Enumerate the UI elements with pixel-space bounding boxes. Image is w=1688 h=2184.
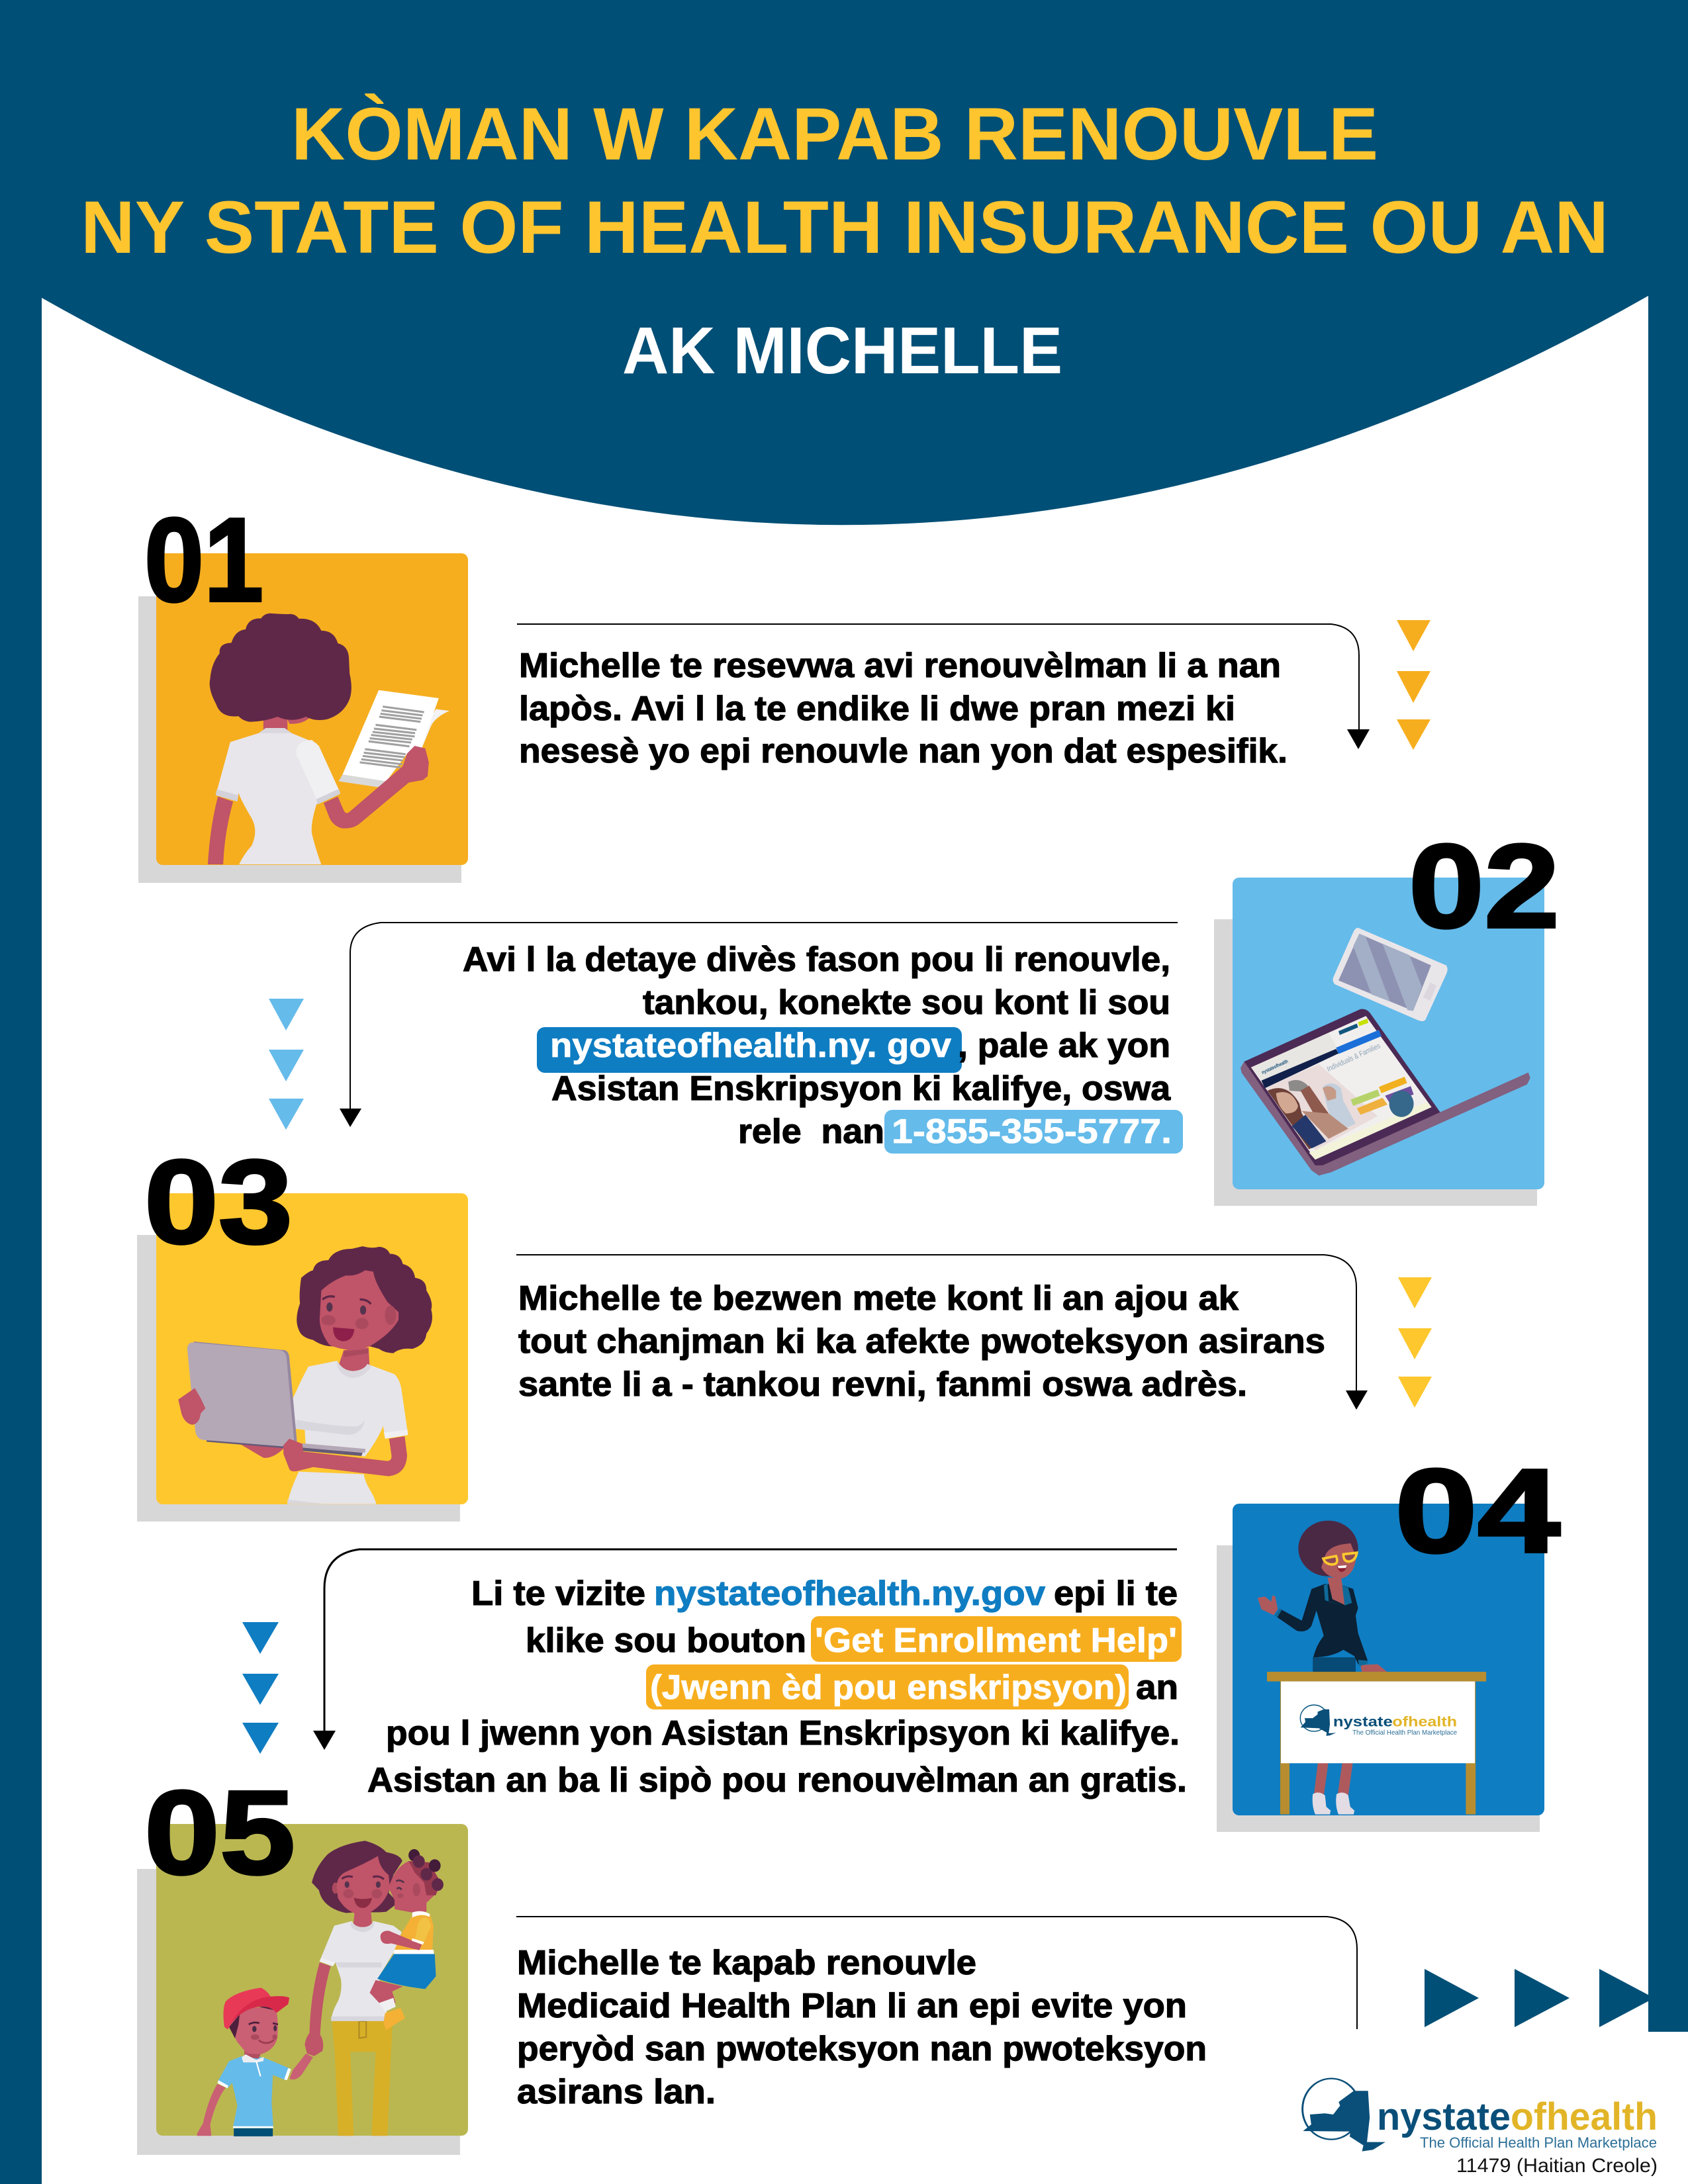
logo: NY State of Health: ofhealth xyxy=(1511,2095,1658,2138)
text block: step 02: Asistan Enskripsyon ki kalifye, oswa xyxy=(551,1069,1171,1108)
number 04: 04 xyxy=(1395,1445,1560,1578)
text block: step 05: peryòd san pwoteksyon nan pwoteksyon xyxy=(517,2030,1207,2068)
logo: NY State of Health: 11479 (Haitian Creole) xyxy=(1456,2155,1658,2177)
number 01: 01 xyxy=(144,494,263,627)
arrow: step 01 to 02 xyxy=(517,624,1370,749)
text block: step 05 xyxy=(517,1944,1207,2111)
number 02: 02 xyxy=(1409,820,1560,953)
icon: yellow chevrons 03 xyxy=(1398,1277,1432,1408)
connector: step 05 xyxy=(516,1917,1357,2029)
logo: NY State of Health: The Official Health Plan Marketplace xyxy=(1420,2134,1657,2151)
button chip: Get Enrollment Help: 'Get Enrollment Help' xyxy=(815,1621,1177,1660)
text block: step 04: pou l jwenn yon Asistan Enskripsyon ki kalifye. xyxy=(386,1714,1180,1752)
number 05: 05 xyxy=(144,1766,295,1899)
illustration: phone and tablet showing website: Individuals & Families xyxy=(1326,1042,1382,1073)
text block: step 03: Michelle te bezwen mete kont li an ajou ak xyxy=(518,1279,1239,1318)
text block: step 05: asirans lan. xyxy=(517,2073,716,2111)
logo on desk: nystate xyxy=(1333,1714,1393,1730)
text block: step 02 xyxy=(463,940,1183,1154)
button chip: Jwenn ed: (Jwenn èd pou enskripsyon) xyxy=(650,1668,1127,1707)
illustration: phone and tablet showing website: nystateofhealth xyxy=(1261,1058,1289,1075)
arrow: step 04 to 05 xyxy=(313,1549,1177,1750)
text block: step 05: Michelle te kapab renouvle xyxy=(517,1944,976,1982)
icon: blue chevrons 02 xyxy=(269,999,304,1130)
text block: step 04: klike sou bouton xyxy=(526,1621,806,1660)
text block: step 01 xyxy=(519,647,1288,770)
number 03: 03 xyxy=(144,1136,293,1269)
panel: step 01 illustration xyxy=(138,494,468,883)
panel: step 04 illustration xyxy=(1217,1445,1560,1832)
icon: yellow chevrons 01 xyxy=(1397,620,1430,750)
illustration: phone and tablet showing website xyxy=(1241,928,1530,1175)
text block: step 04: epi li te xyxy=(1054,1574,1178,1613)
icon: blue chevrons 04 xyxy=(242,1622,279,1754)
arrow: step 03 to 04 xyxy=(516,1255,1368,1410)
panel: step 05 illustration xyxy=(137,1766,468,2155)
text block: step 02: tankou, konekte sou kont li sou xyxy=(643,983,1170,1022)
logo on desk xyxy=(1300,1705,1457,1737)
text block: step 03: sante li a - tankou revni, fanmi oswa adrès. xyxy=(518,1365,1247,1404)
title: NY STATE OF HEALTH INSURANCE OU AN xyxy=(81,186,1609,269)
link chip: website: nystateofhealth.ny. gov xyxy=(550,1026,951,1065)
logo: NY State of Health: nystate xyxy=(1377,2095,1511,2138)
text block: step 01: lapòs. Avi l la te endike li dwe pran mezi ki xyxy=(519,690,1235,728)
text block: step 02: rele nan xyxy=(738,1113,884,1151)
title: KÒMAN W KAPAB RENOUVLE xyxy=(291,93,1378,175)
text block: step 04: an xyxy=(1136,1668,1178,1707)
logo on desk: The Official Health Plan Marketplace xyxy=(1352,1729,1457,1737)
text block: step 05: Medicaid Health Plan li an epi evite yon xyxy=(517,1987,1187,2025)
text block: step 01: Michelle te resevwa avi renouvèlman li a nan xyxy=(519,647,1281,685)
text block: step 04: nystateofhealth.ny.gov xyxy=(654,1574,1045,1613)
text block: step 04 xyxy=(367,1574,1187,1799)
text block: step 02: , pale ak yon xyxy=(958,1026,1170,1065)
illustration: mother with two children xyxy=(197,1841,444,2136)
subtitle: AK MICHELLE xyxy=(622,314,1062,388)
text block: step 01: nesesè yo epi renouvle nan yon dat espesifik. xyxy=(519,732,1288,770)
title xyxy=(81,93,1609,269)
text block: step 04: Asistan an ba li sipò pou renouvèlman an gratis. xyxy=(367,1761,1187,1799)
logo on desk: ofhealth xyxy=(1392,1714,1457,1730)
icon: navy arrows xyxy=(1425,1969,1654,2027)
phone chip: 1-855-355-5777. xyxy=(892,1113,1172,1151)
illustration: woman holding laptop xyxy=(178,1246,432,1504)
text block: step 03 xyxy=(518,1279,1325,1404)
panel: step 02 illustration xyxy=(1214,820,1560,1206)
panel: step 03 illustration xyxy=(137,1136,468,1522)
logo: NY State of Health xyxy=(1303,2079,1658,2177)
text block: step 02: Avi l la detaye divès fason pou li renouvle, xyxy=(463,940,1170,979)
text block: step 04: Li te vizite xyxy=(471,1574,645,1613)
illustration: enrollment assistor at desk xyxy=(1258,1521,1486,1815)
arrow: step 02 to 03 xyxy=(340,923,1178,1127)
text block: step 03: tout chanjman ki ka afekte pwoteksyon asirans xyxy=(518,1322,1325,1361)
illustration: woman reading letter xyxy=(208,614,449,864)
